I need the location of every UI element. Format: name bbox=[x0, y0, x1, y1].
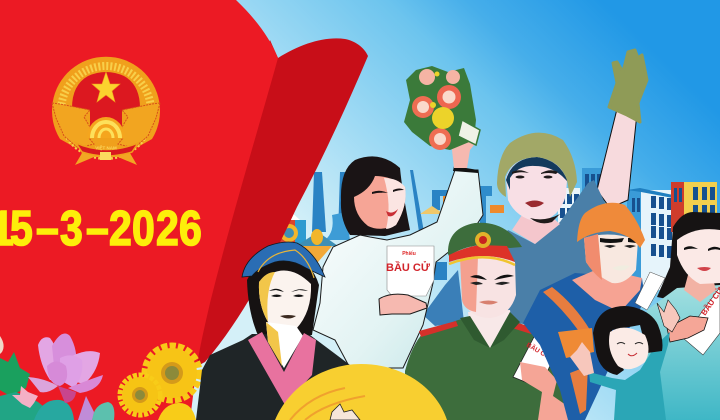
bouquet foliage bbox=[404, 66, 476, 150]
left hand bbox=[570, 342, 594, 376]
sunflower small bbox=[121, 376, 159, 414]
back ballot bbox=[635, 272, 665, 310]
figure: construction worker bbox=[523, 203, 645, 420]
figure: ethnic woman with blue headscarf bbox=[196, 242, 350, 420]
facial features bbox=[684, 246, 720, 271]
neck bbox=[684, 275, 716, 302]
emblem ribbon bbox=[75, 148, 137, 165]
right hand bbox=[657, 300, 680, 332]
neck and collar bbox=[468, 310, 512, 348]
hair bbox=[341, 156, 410, 236]
long black hair bbox=[657, 212, 720, 300]
ballot held bbox=[386, 246, 434, 296]
blue sleeve bbox=[423, 270, 464, 326]
face bbox=[584, 234, 638, 283]
lotus flower bbox=[28, 334, 103, 403]
figure: police officer bbox=[405, 223, 576, 420]
figure: raised arm soldier bbox=[480, 50, 647, 325]
officer ballot bbox=[513, 335, 558, 388]
small pink flower bbox=[12, 386, 38, 408]
emblem label: VIỆT NAM bbox=[95, 144, 117, 150]
emblem right dragon bbox=[118, 103, 160, 148]
work glove bbox=[609, 50, 647, 122]
ao dai body bbox=[313, 170, 483, 368]
sunflower bottom bbox=[158, 403, 196, 420]
conical hat bbox=[275, 364, 447, 420]
left factory skyline bbox=[275, 170, 504, 280]
hair bbox=[506, 157, 568, 190]
right city buildings bbox=[558, 168, 717, 290]
blue headscarf bbox=[242, 242, 325, 277]
national emblem bbox=[52, 57, 160, 165]
officer ballot label: BẦU CỬ bbox=[525, 339, 553, 361]
face bbox=[677, 229, 720, 284]
face bbox=[609, 328, 648, 369]
figure: woman in teal bbox=[635, 212, 720, 420]
orange helmet bbox=[577, 203, 645, 248]
green uniform bbox=[405, 316, 576, 420]
emblem star bbox=[92, 72, 120, 102]
building: yellow and red tower bbox=[671, 182, 717, 232]
ballot label: BẦU CỬ bbox=[386, 261, 431, 274]
features bbox=[617, 342, 643, 356]
emblem left dragon bbox=[52, 103, 94, 148]
red epaulettes bbox=[419, 321, 546, 338]
orange bag bbox=[558, 328, 594, 358]
black blouse bbox=[196, 334, 350, 420]
roses bbox=[412, 69, 461, 150]
face bbox=[506, 157, 567, 222]
teal dress bbox=[589, 332, 670, 420]
raised arm bbox=[597, 109, 637, 208]
face bbox=[460, 256, 516, 318]
blue jacket bbox=[523, 273, 645, 420]
flowers bbox=[0, 334, 198, 420]
eyes and mouth bbox=[269, 289, 308, 318]
building: low white block bbox=[558, 188, 580, 228]
building: blue and white tower bbox=[627, 188, 674, 290]
emblem gear bbox=[87, 117, 125, 138]
pink flower top edge bbox=[0, 336, 4, 354]
flag fold dark bbox=[190, 38, 368, 370]
forearm hand bbox=[379, 294, 427, 315]
raised hand bbox=[451, 118, 478, 168]
back hair bbox=[247, 255, 319, 340]
lily leaves bbox=[0, 352, 114, 420]
cap bbox=[448, 223, 522, 265]
hand on chest bbox=[667, 316, 708, 342]
coiled rope bbox=[543, 287, 590, 330]
facial features bbox=[512, 170, 560, 223]
teal ao dai bbox=[645, 285, 720, 420]
sunflower large bbox=[146, 347, 198, 399]
face bbox=[354, 176, 406, 229]
figure: woman in ao dai bbox=[313, 118, 483, 368]
neck bbox=[266, 322, 303, 368]
bouquet wrap bbox=[458, 120, 480, 145]
blue shirt bbox=[480, 180, 630, 325]
ballot small label: Phiếu bbox=[402, 250, 416, 257]
flag main bbox=[0, 0, 278, 420]
officer hand bbox=[520, 362, 576, 420]
cuff bbox=[453, 166, 478, 173]
bouquet of flowers bbox=[404, 66, 480, 150]
helmet bbox=[497, 133, 577, 197]
building: small blue tower bbox=[582, 168, 604, 218]
face bbox=[259, 270, 311, 331]
lower rope bbox=[570, 366, 588, 414]
hair bbox=[593, 306, 662, 375]
pink collar bbox=[248, 332, 316, 405]
figure: child bbox=[570, 300, 680, 420]
neck bbox=[512, 215, 560, 244]
lotus bud bbox=[78, 396, 94, 420]
front ballot bbox=[683, 285, 720, 355]
emblem outer ring bbox=[52, 57, 160, 148]
